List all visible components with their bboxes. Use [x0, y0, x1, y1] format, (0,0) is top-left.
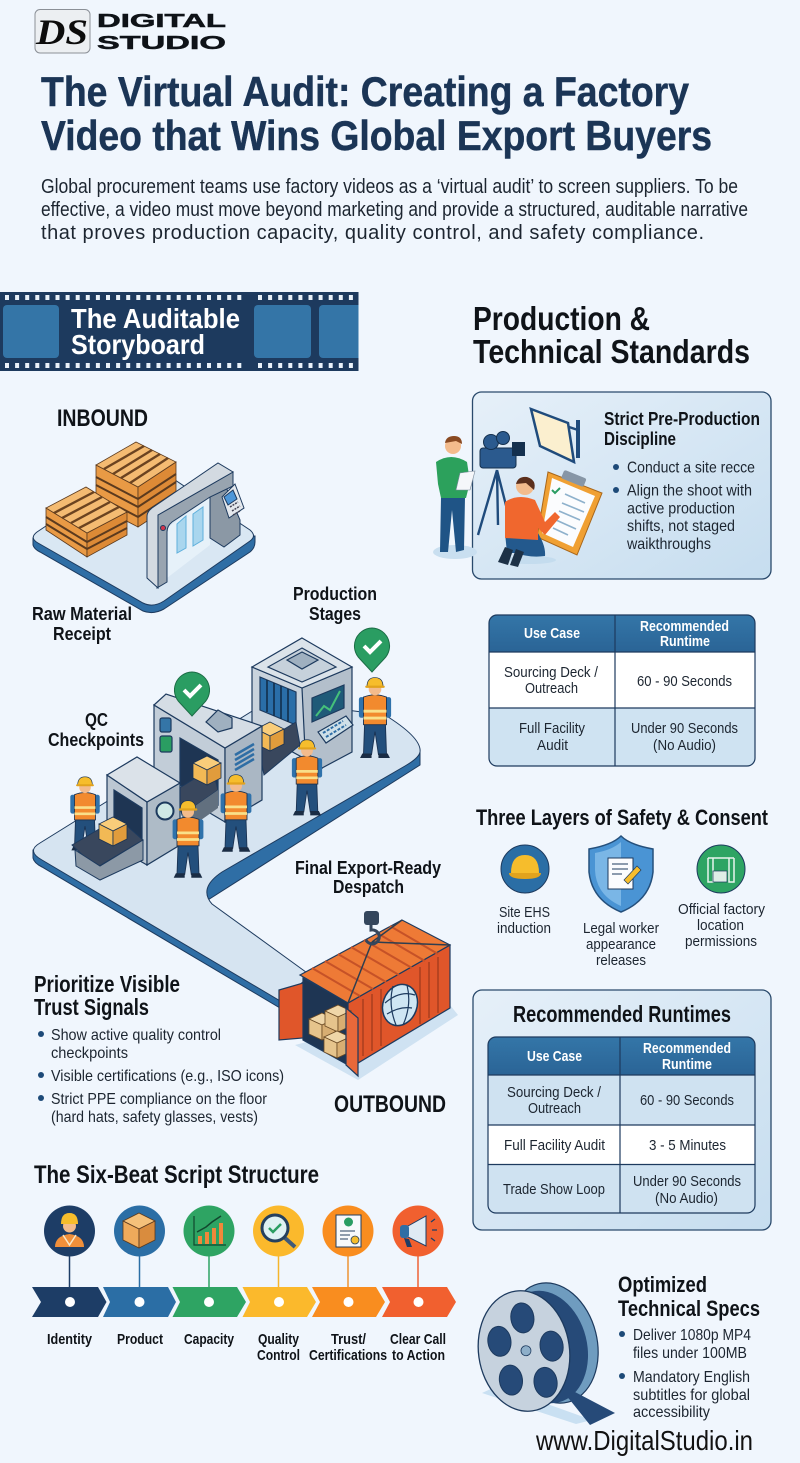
- tripod and camera: [478, 432, 525, 535]
- label: OUTBOUND: OUTBOUND: [334, 1091, 446, 1118]
- label: Raw Material Receipt: Raw Material: [32, 604, 132, 624]
- logo: Digital Studio: [35, 10, 226, 53]
- standing crew member: [436, 436, 475, 552]
- beat labels: Certifications: [309, 1347, 387, 1364]
- connector lines: [70, 1250, 418, 1288]
- label: QC Checkpoints: Checkpoints: [48, 730, 144, 750]
- logo: Digital Studio: DS: [35, 12, 88, 52]
- workers: [173, 801, 203, 878]
- illustration: film reel: [471, 1273, 615, 1425]
- illustration: main production floor, machines, workers: [33, 628, 420, 1008]
- illustration: shipping container with crane hook: [279, 911, 458, 1080]
- panel text: shifts, not staged: [627, 518, 735, 535]
- icon: worker identity: [44, 1206, 95, 1256]
- table: use case and runtime (lower): [488, 1037, 755, 1213]
- icon captions: Site EHS: [499, 904, 550, 921]
- light panel: [531, 409, 578, 462]
- label: Production Stages: Stages: [309, 604, 361, 624]
- icon captions: appearance: [586, 936, 656, 953]
- icon: product box: [114, 1206, 165, 1256]
- text block: Optimized Technical Specs: [618, 1272, 760, 1421]
- beat labels: [47, 1331, 446, 1364]
- icon: megaphone: [392, 1206, 444, 1256]
- text block: Prioritize Visible Trust Signals: Trust Signals: [34, 994, 149, 1020]
- panel text: active production: [627, 500, 735, 518]
- crane hook and ropes: [348, 911, 450, 1003]
- film strip banner: The Auditable Storyboard: The Auditable: [71, 303, 240, 334]
- label: Final Export-Ready Despatch: Final Export-Ready: [295, 858, 441, 878]
- panel text: Strict Pre-Production: [604, 409, 760, 429]
- panel: Strict Pre-Production Discipline: [433, 392, 771, 579]
- label: Raw Material Receipt: Receipt: [53, 624, 111, 644]
- globe emblem: [377, 979, 423, 1031]
- table: use case and runtime (upper): Use Case: [524, 625, 580, 642]
- machine: production stage: [252, 638, 353, 768]
- icon: quality magnifier: [253, 1206, 304, 1256]
- table: use case and runtime (upper): Runtime: [660, 633, 710, 650]
- text block: Optimized Technical Specs: Deliver 1080p MP4: [633, 1327, 751, 1344]
- beat labels: Trust/: [331, 1331, 367, 1348]
- label: Production Stages: [293, 584, 377, 624]
- beat labels: Clear Call: [390, 1331, 446, 1348]
- kneeling crew member: [498, 477, 560, 567]
- pallet stack: front: [46, 487, 127, 557]
- text block: Prioritize Visible Trust Signals: (hard hats, safety glasses, vests): [51, 1109, 258, 1126]
- label: Final Export-Ready Despatch: [295, 858, 441, 897]
- table: use case and runtime (upper): [489, 615, 755, 766]
- table: use case and runtime (lower): Trade Show Loop: [503, 1181, 605, 1198]
- text block: Prioritize Visible Trust Signals: Strict PPE compliance on the floor: [51, 1091, 268, 1108]
- intro text: that proves production capacity, quality control, and safety compliance.: [41, 222, 704, 244]
- section: Three Layers of Safety and Consent: [476, 805, 769, 969]
- table: use case and runtime (upper): Full Facility: [519, 720, 585, 737]
- text block: Optimized Technical Specs: accessibility: [633, 1404, 710, 1421]
- table: use case and runtime (upper): 60 - 90 Seconds: [637, 673, 732, 690]
- heading: Recommended Runtimes: [513, 1001, 731, 1027]
- icon captions: permissions: [685, 933, 757, 950]
- text block: Optimized Technical Specs: Mandatory English: [633, 1369, 750, 1386]
- text block: Optimized Technical Specs: Optimized: [618, 1272, 707, 1297]
- illustration: film crew on site: [433, 409, 602, 567]
- beat labels: to Action: [392, 1347, 445, 1364]
- table: use case and runtime (lower): Full Facility Audit: [504, 1137, 606, 1154]
- intro text: [41, 176, 748, 244]
- clipboard: [537, 470, 602, 555]
- scanner gate: [147, 463, 244, 588]
- table: use case and runtime (lower): Use Case: [527, 1048, 582, 1065]
- table: use case and runtime (lower): Outreach: [528, 1100, 581, 1117]
- icon captions: [497, 901, 765, 969]
- panel text: Discipline: [604, 429, 676, 449]
- heading: Production and Technical Standards: Technical Standards: [473, 333, 750, 370]
- panel text: waikthroughs: [626, 536, 711, 553]
- conveyor: front: [72, 818, 143, 880]
- text block: Prioritize Visible Trust Signals: Show active quality control: [51, 1027, 221, 1044]
- panel text: Conduct a site recce: [627, 460, 755, 476]
- icon captions: Official factory: [678, 901, 765, 918]
- heading: The Six-Beat Script Structure: [34, 1161, 319, 1189]
- table: use case and runtime (lower): Runtime: [662, 1056, 712, 1073]
- table: use case and runtime (lower): Recommended: [643, 1040, 731, 1057]
- platform: [33, 752, 420, 1008]
- icon captions: location: [697, 917, 744, 934]
- worker behind conveyor: [70, 777, 100, 850]
- text block: Prioritize Visible Trust Signals: Visible certifications (e.g., ISO icons): [51, 1068, 284, 1085]
- icon: certificate: [322, 1206, 374, 1256]
- table: use case and runtime (upper): Audit: [537, 737, 569, 754]
- panel text: [604, 409, 760, 553]
- text block: Prioritize Visible Trust Signals: [34, 971, 284, 1126]
- icon: capacity chart: [184, 1206, 234, 1256]
- conveyor and box: production to QC: [258, 722, 300, 775]
- label: QC Checkpoints: [48, 710, 144, 750]
- panel text: Align the shoot with: [627, 482, 752, 500]
- text block: Optimized Technical Specs: files under 100MB: [633, 1345, 747, 1362]
- label: QC Checkpoints: QC: [85, 710, 108, 730]
- title: The Virtual Audit: Creating a Factory: [41, 68, 690, 115]
- text block: Optimized Technical Specs: subtitles for global: [633, 1387, 750, 1404]
- table: use case and runtime (upper): Sourcing Deck /: [504, 664, 599, 681]
- table: use case and runtime (lower): 60 - 90 Seconds: [640, 1092, 734, 1109]
- icon captions: Legal worker: [583, 920, 659, 937]
- text block: Prioritize Visible Trust Signals: Prioritize Visible: [34, 971, 180, 997]
- chevron timeline: [32, 1287, 456, 1317]
- illustration: inbound platform with pallets and scanner gate: [33, 442, 255, 613]
- panel: Recommended Runtimes: [473, 990, 771, 1230]
- beat labels: Quality: [258, 1331, 300, 1348]
- beat labels: Identity: [47, 1331, 93, 1348]
- title: [41, 68, 712, 159]
- machine: QC checkpoint: [154, 694, 262, 822]
- check pins: [354, 628, 390, 672]
- heading: Production and Technical Standards: [473, 300, 750, 370]
- beat labels: Control: [257, 1347, 300, 1364]
- table: use case and runtime (lower): (No Audio): [655, 1190, 718, 1207]
- table: use case and runtime (upper): Outreach: [525, 680, 578, 697]
- icon: shield with document: [589, 836, 653, 912]
- table: use case and runtime (upper): Recommended: [640, 618, 729, 635]
- beat labels: Capacity: [184, 1331, 235, 1348]
- pallet stack: rear: [96, 442, 176, 527]
- icon: factory gate: [697, 845, 745, 893]
- machine: front inspection: [107, 757, 180, 865]
- film strip banner: The Auditable Storyboard: Storyboard: [71, 329, 205, 360]
- table: use case and runtime (lower): Sourcing Deck /: [507, 1084, 602, 1101]
- label: Production Stages: Production: [293, 584, 377, 604]
- section: The Six-Beat Script Structure: [32, 1161, 456, 1364]
- table: use case and runtime (upper): Under 90 Seconds: [631, 720, 738, 737]
- label: Raw Material Receipt: [32, 604, 132, 644]
- label: INBOUND: INBOUND: [57, 405, 148, 432]
- icon captions: induction: [497, 920, 551, 937]
- label: Final Export-Ready Despatch: Despatch: [333, 877, 404, 897]
- footer url: www.DigitalStudio.in: [535, 1425, 753, 1456]
- film strip banner: The Auditable Storyboard: [0, 292, 358, 371]
- table: use case and runtime (lower): Under 90 Seconds: [633, 1173, 741, 1190]
- text block: Optimized Technical Specs: Technical Specs: [618, 1296, 760, 1321]
- icon: hard hat: [501, 845, 549, 893]
- heading: Production and Technical Standards: Production &: [473, 300, 650, 337]
- table: use case and runtime (upper): (No Audio): [653, 737, 716, 754]
- title: Video that Wins Global Export Buyers: [41, 112, 712, 159]
- logo: Digital Studio: STUDIO: [97, 33, 226, 53]
- icon captions: releases: [596, 952, 646, 969]
- beat labels: Product: [117, 1331, 163, 1348]
- logo: Digital Studio: DIGITAL: [97, 11, 226, 31]
- text block: Prioritize Visible Trust Signals: checkpoints: [51, 1045, 128, 1062]
- table: use case and runtime (lower): 3 - 5 Minutes: [649, 1137, 726, 1154]
- conveyor and box: QC middle: [176, 768, 218, 815]
